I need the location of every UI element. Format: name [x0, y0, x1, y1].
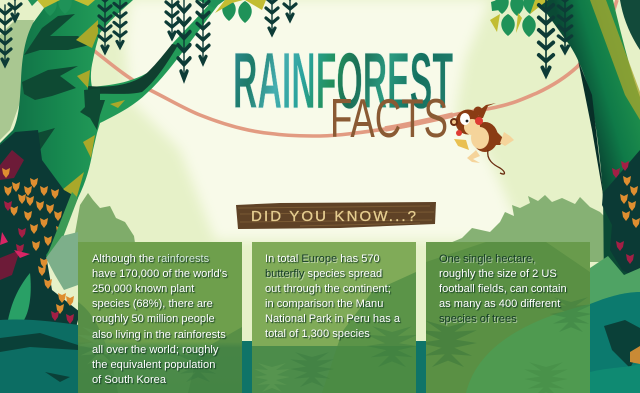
right dark bush with orange leaves	[590, 150, 640, 306]
left water	[0, 319, 80, 393]
panel 2 text: out through the continent;	[265, 283, 391, 295]
panel 2 text: In total Europe has 570	[265, 253, 380, 265]
panel 1 text: species (68%), there are	[92, 298, 213, 310]
panel 2	[252, 242, 416, 393]
background foliage silhouette right	[445, 195, 606, 262]
sign board	[236, 202, 436, 229]
panel 3	[426, 242, 590, 393]
panel 1 text: roughly 50 million people	[92, 313, 215, 325]
right tree	[537, 0, 640, 393]
panel 1 text: also living in the rainforests	[92, 329, 226, 341]
panel 3 text: roughly the size of 2 US	[439, 268, 557, 280]
vine rope	[92, 0, 617, 136]
panel 3 text: football fields, can contain	[439, 283, 567, 295]
panel 3 foliage	[426, 242, 590, 393]
right water	[590, 292, 640, 393]
panel 3 text	[439, 253, 568, 326]
panel 1 text: 250,000 known plant	[92, 283, 194, 295]
panel 1 text: Although the rainforests	[92, 253, 209, 265]
panel 1	[78, 242, 242, 393]
hanging vines	[0, 0, 572, 79]
panel 3 text: as many as 400 different	[439, 298, 560, 310]
title	[233, 36, 453, 149]
panel 2 text: butterfly species spread	[265, 268, 382, 280]
left dark bush with orange leaves	[0, 130, 80, 330]
thick vine segment	[385, 115, 453, 129]
monkey	[450, 103, 514, 174]
centre canopy leaves	[198, 0, 266, 23]
panel 1 text	[92, 253, 228, 386]
left tree	[0, 0, 222, 265]
panel 3 text: species of trees	[439, 313, 517, 325]
right canopy leaves	[490, 0, 548, 37]
background foliage silhouette left	[72, 193, 136, 262]
panel 1 foliage	[78, 302, 242, 382]
panel 1 text: the equivalent population	[92, 359, 215, 371]
panel 2 foliage	[252, 272, 416, 393]
panel 1 text: have 170,000 of the world's	[92, 268, 227, 280]
panel 2 text: in comparison the Manu	[265, 298, 383, 310]
panel 2 text: National Park in Peru has a	[265, 313, 400, 325]
panel 2 text: total of 1,300 species	[265, 328, 370, 340]
background foliage silhouette far left	[0, 20, 34, 140]
panel 1 text: all over the world; roughly	[92, 344, 218, 356]
sign text: DID YOU KNOW...?	[251, 208, 416, 225]
panel 3 text: One single hectare,	[439, 253, 535, 265]
right far dark trunk	[620, 0, 640, 50]
title word: Facts: FACTS	[330, 87, 448, 149]
left canopy leaves	[28, 0, 95, 16]
panel 1 text: of South Korea	[92, 374, 166, 386]
panel 2 text	[265, 253, 402, 341]
centre teal band	[242, 341, 432, 393]
